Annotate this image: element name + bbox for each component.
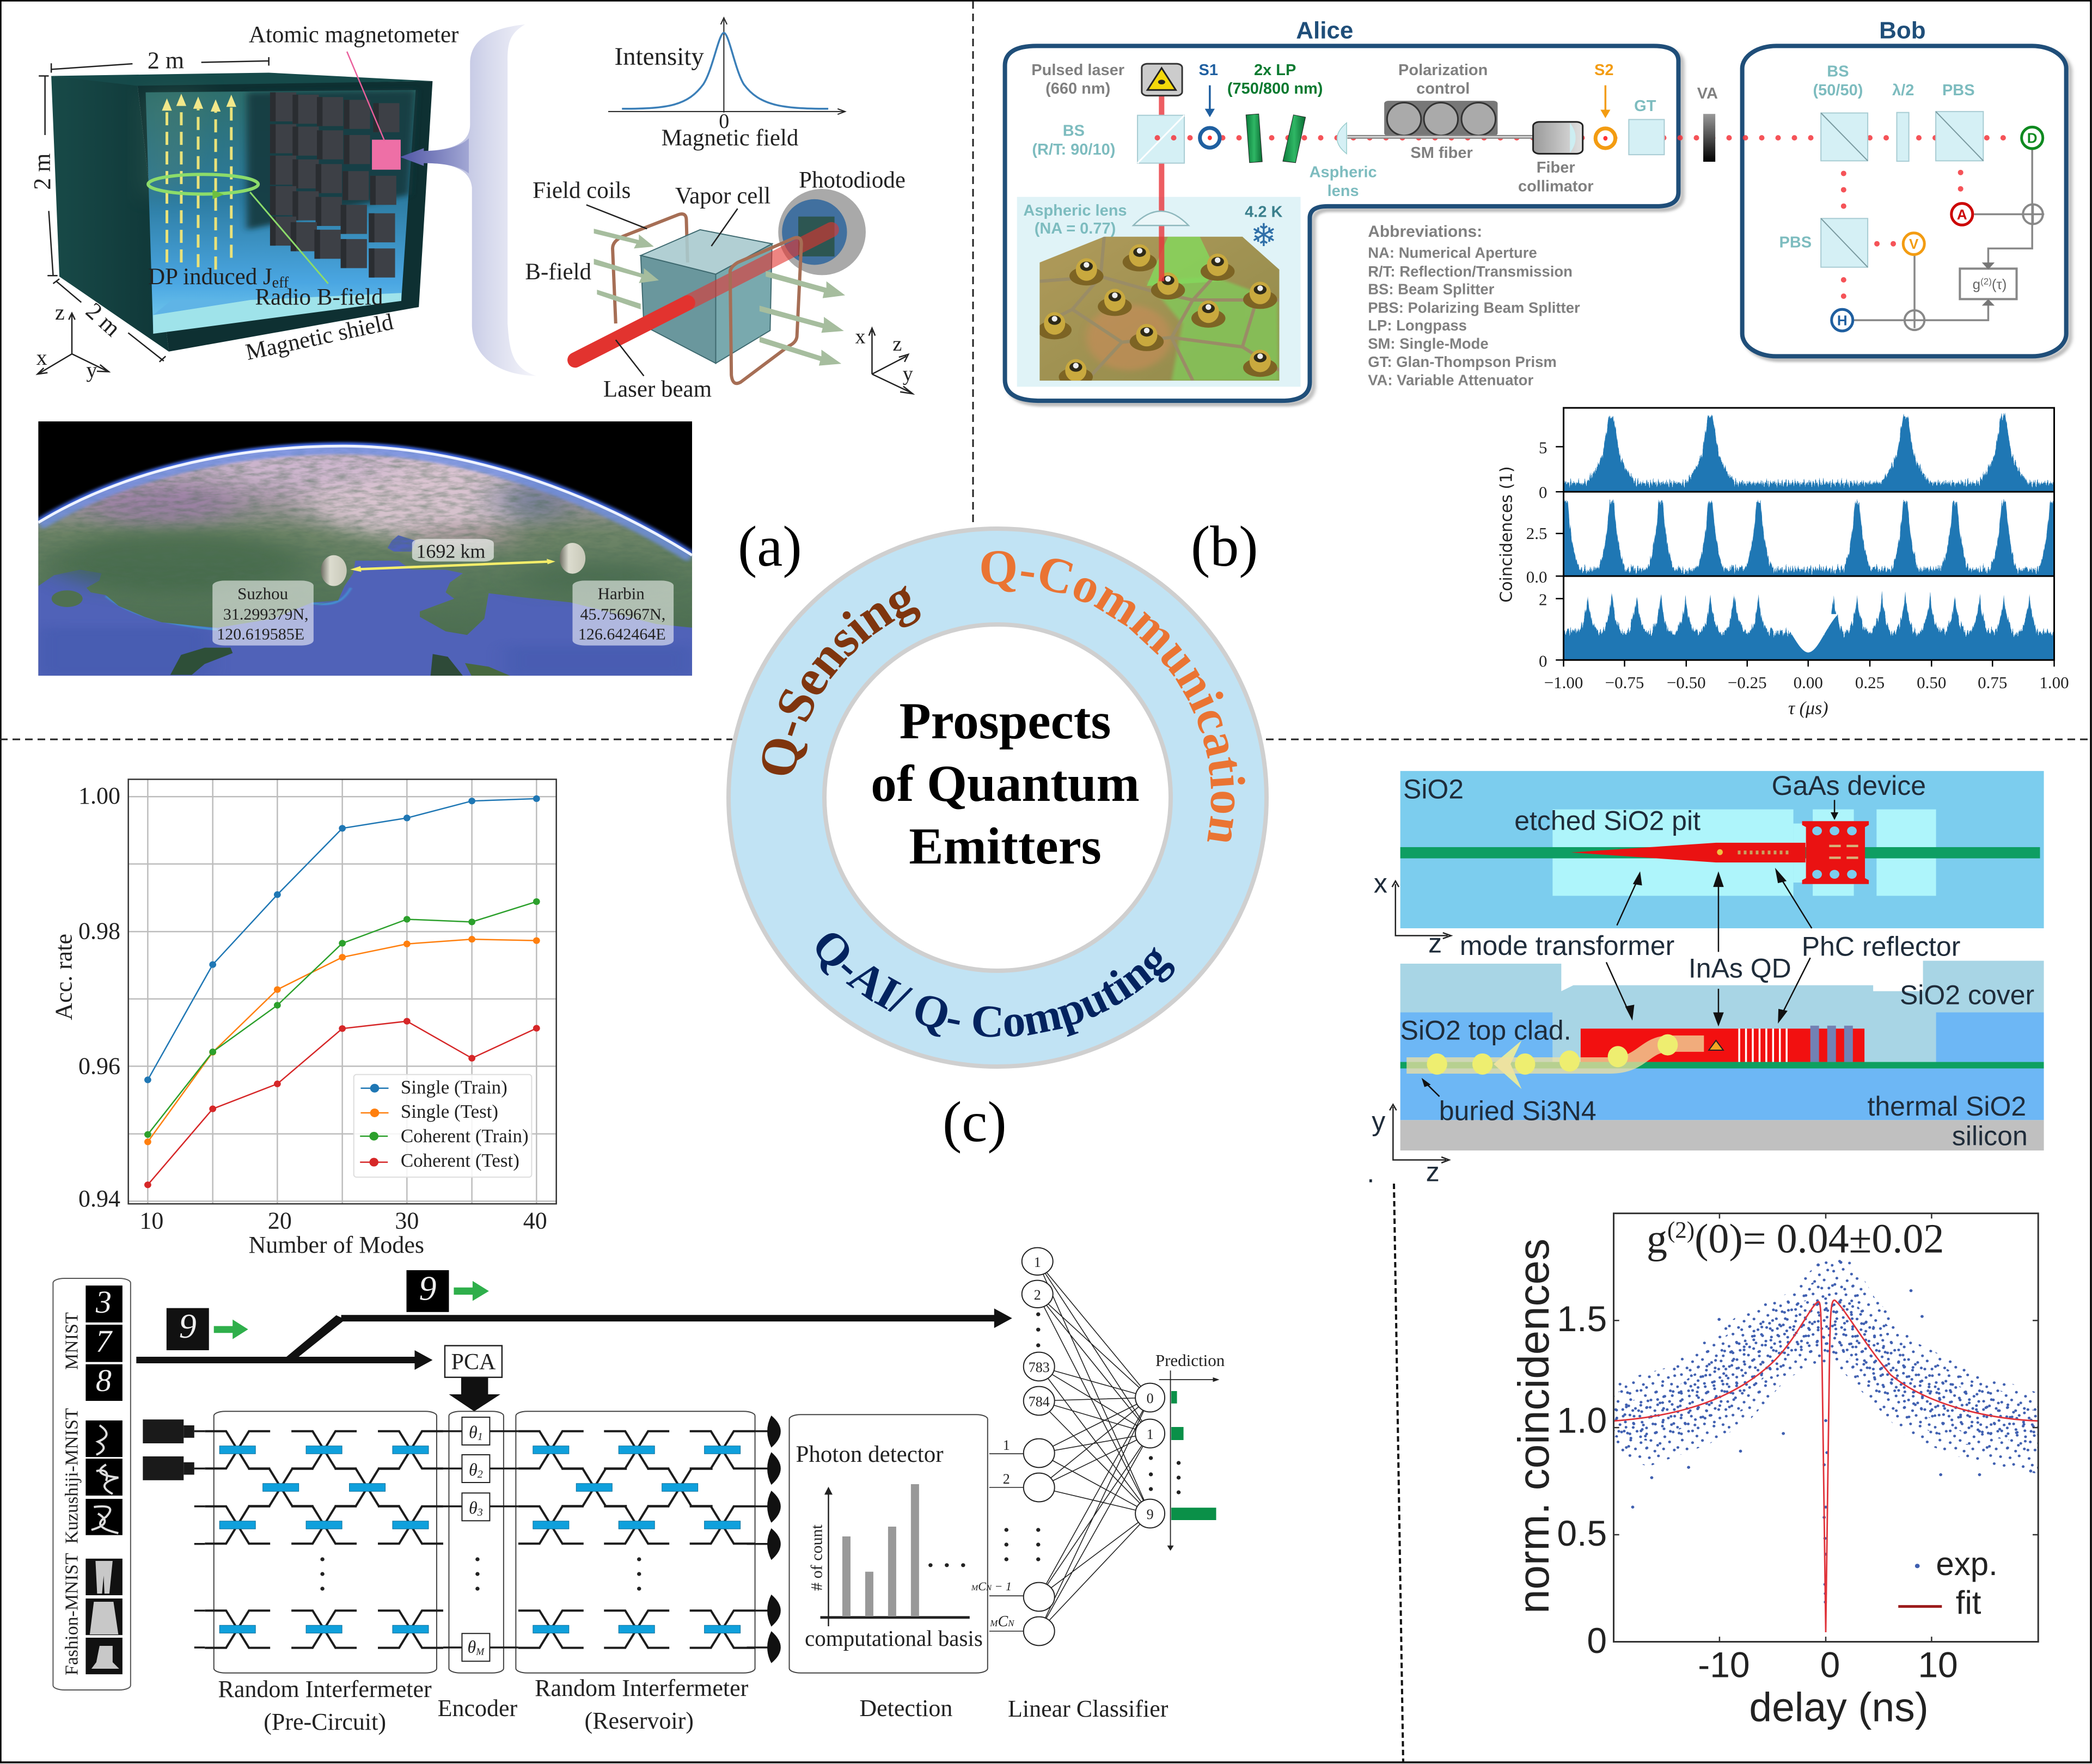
device labels: etched SiO2 pit	[1514, 806, 1700, 836]
detector V	[1903, 233, 1924, 255]
panel: Q-Sensing (a) 3D magnetometer array: Atomic magnetometer	[249, 22, 458, 47]
axes right	[869, 328, 913, 394]
plot frame with ticks	[1614, 1214, 2038, 1642]
variable attenuator	[1703, 114, 1715, 162]
module captions: Encoder	[438, 1695, 518, 1722]
ring label: Q-Sensing: Q-Sensing	[762, 586, 920, 775]
g2 value annotation: (2)	[1667, 1217, 1695, 1243]
Harbin label: 45.756967N,	[580, 605, 665, 623]
distance label: 1692 km	[416, 541, 485, 562]
laser beam	[575, 230, 831, 360]
panel: Q-Sensing (a) 3D magnetometer array: x	[855, 325, 865, 348]
detector V: V	[1909, 236, 1919, 252]
Bob optics	[1821, 112, 1983, 267]
green arrows	[214, 1281, 489, 1339]
node labels	[1003, 1254, 1154, 1522]
beam splitter BS	[1137, 115, 1184, 163]
Harbin label: 126.642464E	[578, 626, 666, 644]
fiber collimator	[1533, 122, 1583, 154]
curly brace connector with arrow	[400, 24, 536, 376]
histogram tick labels: 2	[1539, 590, 1547, 609]
axis tick labels: 40	[523, 1207, 547, 1234]
abbreviations list: LP: Longpass	[1368, 317, 1467, 334]
abbreviations list	[1368, 223, 1580, 389]
node labels: 784	[1029, 1394, 1050, 1410]
detector H: H	[1837, 313, 1848, 329]
panel: Q-Sensing (a) 3D magnetometer array: Vapor cell	[675, 183, 770, 209]
x axis title: Number of Modes	[249, 1232, 424, 1258]
arrow heads	[1982, 262, 1995, 305]
histogram top	[1560, 416, 2054, 501]
magnetic shield box	[51, 72, 432, 352]
node labels: 1	[1034, 1254, 1041, 1270]
PCA box	[445, 1346, 502, 1377]
MCN labels	[971, 1579, 1015, 1630]
device labels: buried Si3N4	[1439, 1095, 1596, 1126]
Harbin label	[572, 580, 674, 646]
encoder phase shifters: 2	[478, 1468, 483, 1480]
MCN labels: MCN	[989, 1613, 1015, 1630]
dataset panel	[53, 1278, 131, 1690]
Alice box	[1005, 46, 1682, 404]
PCA box: PCA	[451, 1350, 496, 1375]
leader lines	[586, 205, 738, 376]
panel: Q-Sensing (a) 3D magnetometer array: Magnetic shield	[243, 309, 395, 365]
Glan-Thompson prism	[1629, 120, 1664, 155]
optics text labels	[1023, 62, 1975, 252]
axis tick labels: 1.00	[78, 782, 120, 809]
node labels: 1	[1147, 1426, 1154, 1442]
node labels: 2	[1003, 1471, 1010, 1487]
panel: Q-Sensing (a) 3D magnetometer array: Photodiode	[799, 167, 906, 193]
panel: photonic reservoir circuit diagram: computational basis	[805, 1626, 983, 1651]
node labels: 9	[1147, 1506, 1154, 1522]
legend: fit	[1956, 1584, 1981, 1621]
device labels: InAs QD	[1689, 953, 1791, 984]
optics text labels: GT	[1634, 97, 1656, 115]
optics text labels: Pulsed laser	[1031, 62, 1124, 79]
histogram tick labels: 0	[1539, 482, 1547, 501]
panel: Q-Sensing (a) 3D magnetometer array: B-field	[525, 259, 591, 285]
panel: Q-Sensing (a) 3D magnetometer array: z	[892, 333, 902, 356]
histogram tick labels: 0.50	[1917, 673, 1946, 692]
fit curve	[1614, 1300, 2038, 1632]
axis tick labels: 1.5	[1557, 1298, 1607, 1339]
histogram tick labels: 0	[1539, 651, 1547, 670]
legend	[354, 1075, 531, 1177]
polarization control paddles	[1347, 101, 1533, 137]
Suzhou label: 120.619585E	[217, 626, 304, 644]
device labels	[1367, 770, 2034, 1189]
optics text labels: PBS	[1779, 234, 1812, 252]
legend: Coherent (Test)	[401, 1150, 519, 1171]
histogram tick labels: 0.25	[1855, 673, 1885, 692]
device labels: SiO2	[1403, 774, 1464, 805]
optics text labels: lens	[1328, 182, 1359, 200]
panel: Q-Sensing (a) 3D magnetometer array: y	[903, 363, 913, 385]
axis tick labels: 0.94	[78, 1185, 120, 1212]
intensity Lorentzian plot	[608, 18, 845, 114]
y axis title: norm. coincidences	[1509, 1239, 1558, 1614]
input digit 9 upper: 9	[419, 1269, 436, 1308]
device labels: thermal SiO2	[1867, 1091, 2026, 1122]
legend: Single (Train)	[401, 1077, 507, 1098]
field coil back	[613, 214, 688, 323]
legend	[1898, 1546, 1998, 1621]
experimental scatter points	[1614, 1257, 2038, 1603]
dimension lines	[39, 57, 269, 362]
input digit 9 lower: 9	[179, 1307, 197, 1345]
cryostat area with quantum dot array	[1017, 197, 1301, 387]
axis tick labels: 30	[395, 1207, 419, 1234]
panel: Q-Sensing (a) 3D magnetometer array: z	[55, 300, 65, 324]
radio B-field ring and leader	[148, 174, 328, 284]
device labels: z	[1428, 928, 1442, 958]
detector wiring	[1854, 146, 2044, 330]
encoder phase shifters: 1	[478, 1431, 483, 1443]
encoder phase shifters: M	[475, 1646, 485, 1657]
dataset labels: Fashion-MNIST	[62, 1553, 82, 1675]
vertical red dots	[1844, 173, 1961, 298]
optics text labels: (750/800 nm)	[1227, 80, 1323, 97]
panel: Q-Sensing (a) 3D magnetometer array: Field coils	[533, 177, 631, 203]
device labels: x	[1374, 868, 1387, 898]
node labels: 2	[1034, 1287, 1041, 1303]
histogram tick labels: 0.0	[1526, 567, 1547, 586]
Suzhou label: Suzhou	[237, 584, 288, 603]
red dotted single-photon beam	[1158, 135, 2011, 140]
optics text labels: BS	[1063, 122, 1085, 140]
section label (a): (a)	[738, 514, 802, 578]
coincidence histograms chart	[1540, 408, 2077, 670]
panel: Q-Sensing (a) 3D magnetometer array: eff	[272, 274, 289, 291]
panel: Q-Communication (b) Alice and Bob setup	[1005, 17, 2077, 718]
pointer to magnetometer	[347, 52, 384, 140]
abbreviations list: PBS: Polarizing Beam Splitter	[1368, 299, 1580, 316]
aspheric lens 2	[1337, 123, 1347, 154]
axis tick labels: 1.0	[1557, 1400, 1607, 1441]
g2 label: (τ)	[1992, 276, 2007, 292]
pre-circuit interferometer mesh	[205, 1431, 443, 1648]
Alice title: Alice	[1296, 17, 1353, 44]
abbreviations list: R/T: Reflection/Transmission	[1368, 263, 1573, 280]
histogram tick labels: −0.75	[1605, 673, 1644, 692]
histogram tick labels	[1526, 438, 2069, 718]
detector A: A	[1957, 206, 1967, 223]
optics text labels: 4.2 K	[1245, 204, 1283, 221]
panel: g2 autocorrelation plot	[1509, 1214, 2038, 1730]
detector D	[2022, 127, 2043, 149]
section label (b): (b)	[1191, 514, 1258, 578]
S1 detector	[1200, 85, 1220, 148]
detector D: D	[2027, 130, 2038, 146]
legend: exp.	[1936, 1546, 1998, 1582]
histogram tick labels: τ (μs)	[1788, 698, 1828, 718]
center title	[871, 692, 1140, 875]
device labels: GaAs device	[1772, 770, 1926, 801]
Suzhou label	[212, 580, 314, 646]
axis tick labels	[78, 782, 547, 1234]
chart grid and frame	[129, 779, 556, 1204]
optics text labels: VA	[1697, 85, 1718, 102]
x axis title: delay (ns)	[1749, 1685, 1929, 1730]
panel: quantum dot waveguide device schematic	[1367, 770, 2044, 1189]
aspheric lens	[1133, 211, 1189, 225]
g2 value annotation: (0)= 0.04±0.02	[1695, 1216, 1944, 1261]
optics text labels: S2	[1594, 62, 1613, 79]
axis tick labels: 0.98	[78, 918, 120, 945]
axis tick labels: 10	[139, 1207, 163, 1234]
Suzhou label: 31.299379N,	[223, 605, 309, 623]
MCN labels: MCN − 1	[971, 1579, 1012, 1593]
panel: g2 autocorrelation plot: 10	[1918, 1644, 1958, 1685]
detector H	[1832, 309, 1853, 331]
legend: Coherent (Train)	[401, 1125, 529, 1147]
device labels: .	[1367, 1158, 1374, 1189]
PCA down arrow	[449, 1377, 500, 1411]
axis tick labels: 20	[268, 1207, 292, 1234]
panel: Q-Sensing (a) 3D magnetometer array: Intensity	[614, 42, 704, 71]
histogram tick labels: 1.00	[2039, 673, 2069, 692]
optics text labels: control	[1416, 80, 1470, 97]
histogram tick labels: 0.75	[1978, 673, 2007, 692]
device labels: z	[1426, 1157, 1440, 1187]
longpass filters	[1246, 114, 1306, 163]
node labels: 0	[1147, 1391, 1154, 1406]
y axis title: Acc. rate	[51, 934, 77, 1020]
module outlines	[214, 1411, 988, 1673]
encoder phase shifters: θ	[469, 1422, 478, 1442]
laser sources	[143, 1419, 194, 1480]
device labels: silicon	[1952, 1120, 2028, 1151]
panel: Q-Sensing (a) 3D magnetometer array: Magnetic field	[662, 125, 798, 151]
series markers	[144, 795, 540, 1188]
module captions: Linear Classifier	[1008, 1695, 1169, 1722]
top view layers	[1400, 771, 2044, 928]
axes	[1390, 881, 1451, 1163]
g2 value annotation: g	[1647, 1216, 1667, 1261]
optics text labels: SM fiber	[1410, 144, 1473, 162]
panel: Q-Sensing (a) 3D magnetometer array: 2 m	[81, 297, 126, 342]
excitation laser beam	[1159, 96, 1164, 281]
panel: Q-Sensing (a) 3D magnetometer array	[29, 18, 913, 402]
input digit 9 lower	[167, 1307, 209, 1350]
single photon detectors	[767, 1416, 781, 1663]
g2 label: (2)	[1980, 276, 1992, 286]
pointer arrows	[1422, 800, 1838, 1097]
device labels: mode transformer	[1460, 930, 1674, 961]
optics text labels: 2x LP	[1254, 62, 1296, 79]
panel: photonic reservoir circuit diagram	[53, 1248, 1225, 1735]
optics text labels: BS	[1827, 63, 1849, 80]
axis tick labels	[1557, 1298, 1607, 1661]
panel: Q-Sensing (a) 3D magnetometer array: DP induced J	[148, 264, 272, 290]
module captions: Random Interfermeter	[535, 1675, 749, 1701]
center title: Prospects	[900, 692, 1111, 750]
histogram tick labels: −0.25	[1728, 673, 1767, 692]
reservoir interferometer mesh	[518, 1431, 755, 1648]
axis tick labels: 0.96	[78, 1052, 120, 1079]
optics text labels: (660 nm)	[1045, 80, 1110, 97]
Bob title: Bob	[1879, 17, 1926, 44]
field coil front	[730, 237, 802, 383]
abbreviations list: VA: Variable Attenuator	[1368, 372, 1533, 389]
detection text: Photon detector	[796, 1442, 944, 1467]
panel: Q-Sensing (a) 3D magnetometer array: 2 m	[29, 154, 56, 190]
device labels: PhC reflector	[1802, 931, 1960, 961]
dataset panel: 7	[96, 1324, 113, 1359]
optics text labels: (50/50)	[1813, 82, 1863, 99]
panel: g2 autocorrelation plot: 0	[1820, 1644, 1840, 1685]
detection bar chart	[820, 1484, 970, 1626]
optics text labels: Fiber	[1537, 159, 1575, 176]
waveguide links	[194, 1431, 772, 1647]
ring label: Q-Communication: Q-Communication	[981, 551, 1245, 842]
panel: Earth satellite link image	[38, 421, 692, 676]
pulsed laser icon	[1142, 64, 1182, 96]
dataset labels: MNIST	[62, 1312, 82, 1370]
g2 label: g	[1973, 276, 1980, 292]
histogram y axis title: Coincidences (1)	[1497, 466, 1516, 603]
section label (c): (c)	[943, 1090, 1007, 1154]
central ring	[726, 526, 1269, 1069]
optics text labels: PBS	[1942, 82, 1975, 99]
optics text labels: collimator	[1518, 177, 1593, 195]
ellipsis dots	[320, 1312, 1180, 1591]
optics text labels: S1	[1199, 62, 1218, 79]
abbreviations list: BS: Beam Splitter	[1368, 281, 1495, 298]
Harbin label: Harbin	[598, 584, 645, 603]
optics text labels: (NA = 0.77)	[1035, 220, 1116, 237]
dataset panel: 3	[95, 1284, 112, 1320]
icon: snowflake: ❄	[1251, 217, 1277, 254]
S2 detector	[1595, 85, 1616, 148]
Bob box	[1742, 46, 2070, 359]
prediction output bars	[1159, 1370, 1220, 1551]
module captions: Detection	[859, 1695, 952, 1722]
dataset labels	[62, 1312, 82, 1675]
panel: Q-Sensing (a) 3D magnetometer array: x	[36, 345, 47, 370]
data bus arrows	[136, 1308, 1012, 1370]
encoder phase shifters: θ	[469, 1460, 478, 1479]
dataset labels: Kuzushiji-MNIST	[62, 1408, 82, 1544]
node labels: 783	[1029, 1359, 1050, 1375]
prediction label: Prediction	[1155, 1351, 1225, 1370]
coordinate axes	[38, 313, 109, 374]
center title: Emitters	[909, 817, 1102, 875]
histogram tick labels: 5	[1539, 438, 1547, 457]
device labels: SiO2 top clad.	[1400, 1015, 1571, 1045]
device labels: SiO2 cover	[1900, 979, 2034, 1010]
abbreviations list: NA: Numerical Aperture	[1368, 244, 1537, 261]
abbreviations list: Abbreviations:	[1368, 223, 1482, 241]
abbreviations list: SM: Single-Mode	[1368, 335, 1489, 352]
histogram tick labels: 0.00	[1794, 673, 1823, 692]
optics text labels: Aspheric lens	[1023, 202, 1127, 219]
optics text labels: Polarization	[1398, 62, 1488, 79]
panel: photonic reservoir circuit diagram: # of count	[808, 1524, 825, 1591]
module captions: Random Interfermeter	[218, 1676, 432, 1702]
center title: of Quantum	[871, 755, 1140, 812]
optics text labels: Aspheric	[1310, 163, 1377, 181]
node labels: 1	[1003, 1437, 1010, 1453]
histogram tick labels: −1.00	[1544, 673, 1583, 692]
device labels: y	[1372, 1106, 1385, 1136]
series lines	[148, 799, 536, 1185]
panel: Q-Sensing (a) 3D magnetometer array: Radio B-field	[255, 285, 383, 310]
encoder phase shifters: θ	[468, 1637, 476, 1657]
axis tick labels: 0	[1587, 1620, 1607, 1661]
dataset panel: 8	[96, 1363, 112, 1398]
B-field arrows	[594, 229, 845, 366]
cross section layers	[1400, 961, 2044, 1150]
encoder phase shifters: 3	[477, 1506, 483, 1518]
module captions	[218, 1675, 1169, 1735]
module captions: (Pre-Circuit)	[264, 1708, 386, 1735]
histogram middle	[1564, 499, 2054, 575]
input digit 9 upper	[407, 1269, 449, 1312]
dashed yellow field arrows	[162, 94, 236, 270]
panel: Q-Sensing (a) 3D magnetometer array: y	[86, 358, 97, 382]
network nodes	[1022, 1248, 1165, 1645]
panel: Q-Sensing (a) 3D magnetometer array: 0	[719, 110, 729, 133]
histogram tick labels: −0.50	[1667, 673, 1706, 692]
optics text labels: (R/T: 90/10)	[1032, 141, 1115, 158]
label: dimensions: 2 m	[148, 47, 184, 74]
photodiode	[778, 189, 866, 275]
encoder phase shifters: θ	[469, 1498, 478, 1517]
encoder phase shifters	[462, 1417, 490, 1661]
classifier connections	[989, 1261, 1150, 1631]
optics text labels: λ/2	[1892, 82, 1914, 99]
histogram bottom	[1564, 594, 2054, 670]
module captions: (Reservoir)	[585, 1707, 694, 1734]
abbreviations list: GT: Glan-Thompson Prism	[1368, 353, 1557, 370]
ground stations and link	[321, 543, 585, 586]
histogram tick labels: 2.5	[1526, 524, 1547, 543]
earth globe background	[38, 421, 692, 676]
panel: Q-AI accuracy line chart	[51, 779, 556, 1258]
legend: Single (Test)	[401, 1101, 498, 1122]
detector A	[1952, 204, 1973, 225]
vapor cell	[641, 230, 772, 363]
axis tick labels: 0.5	[1557, 1513, 1607, 1553]
panel: g2 autocorrelation plot: -10	[1698, 1644, 1750, 1685]
panel: Q-Sensing (a) 3D magnetometer array: Laser beam	[603, 376, 712, 402]
detector cube array	[270, 93, 401, 278]
ring label: Q-AI/ Q- Computing: Q-AI/ Q- Computing	[816, 933, 1175, 1037]
